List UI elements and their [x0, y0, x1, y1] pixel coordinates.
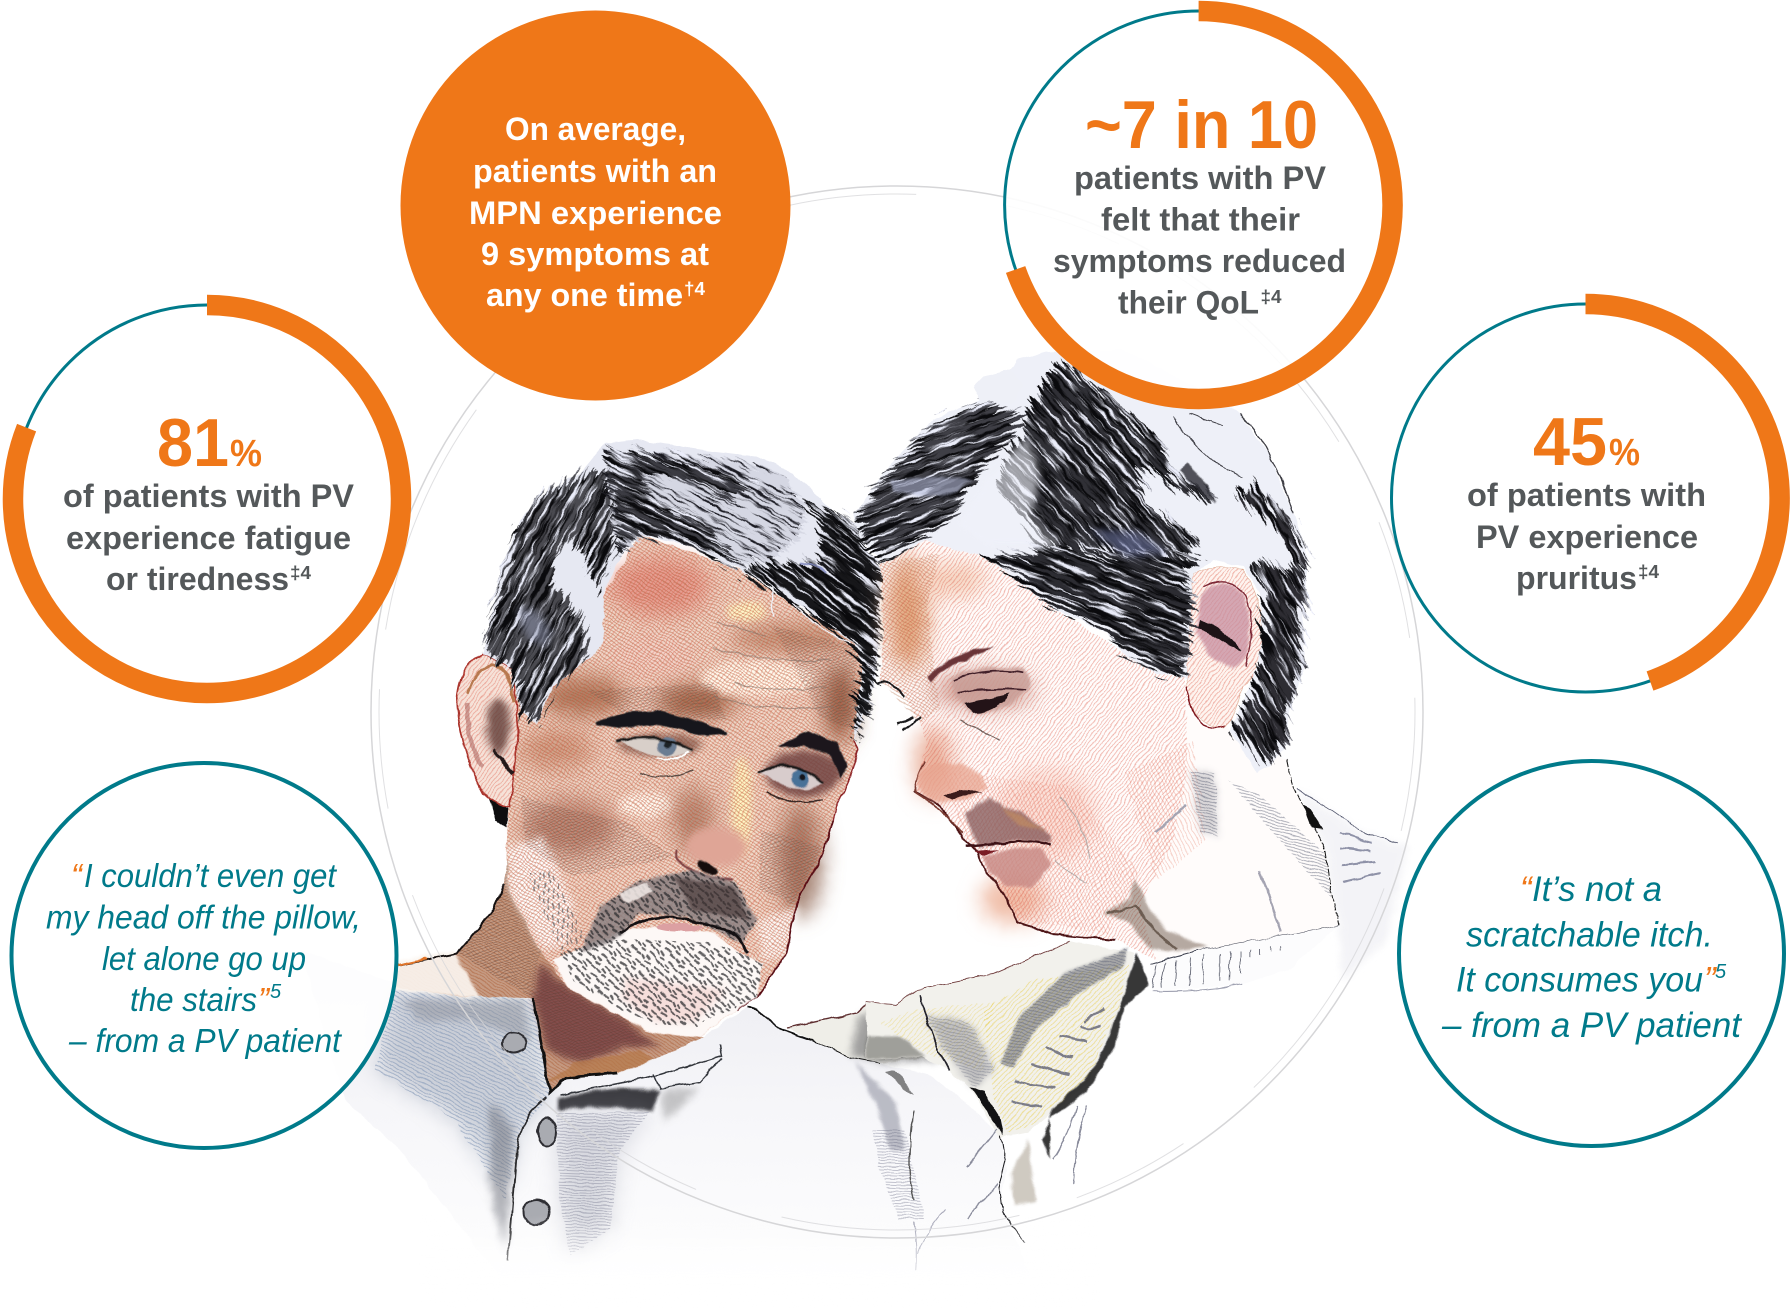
man's hair [378, 370, 997, 808]
text: QoL description: patients with PV [1074, 160, 1327, 196]
text: pruritus description: of patients with [1467, 477, 1706, 513]
quote text: pillow: ” [258, 981, 271, 1018]
man's eyes and eyebrows [597, 712, 847, 802]
quote text: pillow: let alone go up [102, 940, 306, 977]
text: fatigue description: of patients with PV [63, 478, 355, 514]
quote text: itch: It consumes you [1456, 960, 1703, 1000]
text: fatigue description: experience fatigue [66, 520, 351, 556]
quote text: pillow: the stairs [130, 981, 257, 1018]
man's neck [392, 847, 703, 1093]
woman's eye and eyebrow [877, 647, 1031, 740]
woman's hand on man's shoulder [787, 983, 962, 1063]
heading text: on average: On average, [505, 111, 686, 147]
panel: average 9 symptoms (solid orange circle) [400, 10, 790, 400]
text: fatigue description [63, 478, 355, 597]
text: QoL description: ‡4 [1260, 287, 1282, 307]
stat: ~7 in 10: ~7 in 10 [1085, 87, 1318, 163]
text: QoL description: their QoL [1118, 284, 1259, 320]
woman's neck folds [1104, 770, 1332, 951]
woman's right shoulder [1297, 789, 1408, 981]
shirt buttons [502, 1033, 556, 1224]
quote text: itch: ” [1704, 960, 1717, 1000]
man's nose [676, 827, 747, 880]
text: pruritus description [1467, 477, 1706, 596]
quote text: pillow: “ [71, 857, 84, 894]
man's beard [527, 870, 763, 1037]
woman's head [806, 252, 1426, 960]
man's ear [457, 653, 518, 828]
text: QoL description [1053, 160, 1346, 320]
heading text: on average: patients with an [473, 153, 717, 189]
heading text: on average: †4 [684, 279, 705, 299]
woman's ear [1187, 567, 1263, 728]
woman's hair [806, 252, 1426, 795]
illustration: couple leaning heads together [300, 252, 1426, 1309]
text: pruritus description: ‡4 [1638, 562, 1659, 582]
quote text: pillow [46, 857, 361, 1059]
stat: 45%: % [1609, 432, 1640, 474]
panel: 45% pruritus ring [1392, 304, 1780, 692]
quote text: pillow: I couldn’t even get [84, 857, 338, 894]
heading text: on average: 9 symptoms at [481, 236, 709, 272]
bottom fade of the drawing [420, 1215, 1100, 1309]
stat: 45%: 45 [1533, 404, 1607, 480]
text: pruritus description: pruritus [1516, 560, 1637, 596]
heading text: on average: MPN experience [469, 195, 722, 231]
quote text: itch: 5 [1715, 961, 1727, 983]
stat: 81%: 81 [157, 405, 229, 481]
quote text: pillow: – from a PV patient [68, 1022, 343, 1059]
quote text: itch: – from a PV patient [1441, 1006, 1742, 1045]
stat: 81%: % [230, 433, 262, 475]
quote text: itch: It’s not a [1532, 870, 1662, 909]
woman's cardigan [866, 941, 1149, 1271]
quote text: itch: “ [1520, 870, 1534, 909]
man's shirt [300, 950, 1040, 1300]
text: QoL description: symptoms reduced [1053, 243, 1346, 279]
text: pruritus description: PV experience [1476, 519, 1698, 555]
woman's face skin [880, 540, 1339, 960]
quote text: pillow: my head off the pillow, [46, 898, 361, 936]
panel: right patient quote [1399, 761, 1784, 1146]
quote text: itch [1441, 870, 1742, 1045]
woman's sweater collar [1149, 926, 1339, 991]
quote text: itch: scratchable itch. [1466, 916, 1713, 954]
text: fatigue description: or tiredness [106, 561, 289, 597]
man's face skin [507, 533, 863, 1037]
text: QoL description: felt that their [1101, 202, 1300, 238]
panel: 7 in 10 QoL ring [1005, 11, 1393, 399]
woman's nose, mouth and neck detail [915, 760, 1332, 951]
woman's clothing [866, 789, 1408, 1271]
panel: 81% fatigue ring [13, 305, 401, 693]
heading text: on average: any one time [486, 277, 683, 313]
text: fatigue description: ‡4 [290, 563, 311, 583]
background faint double circle [371, 186, 1423, 1238]
heading text: on average [469, 111, 722, 313]
man's head [378, 370, 997, 1093]
panel: left patient quote [12, 763, 396, 1148]
quote text: pillow: 5 [270, 981, 282, 1003]
